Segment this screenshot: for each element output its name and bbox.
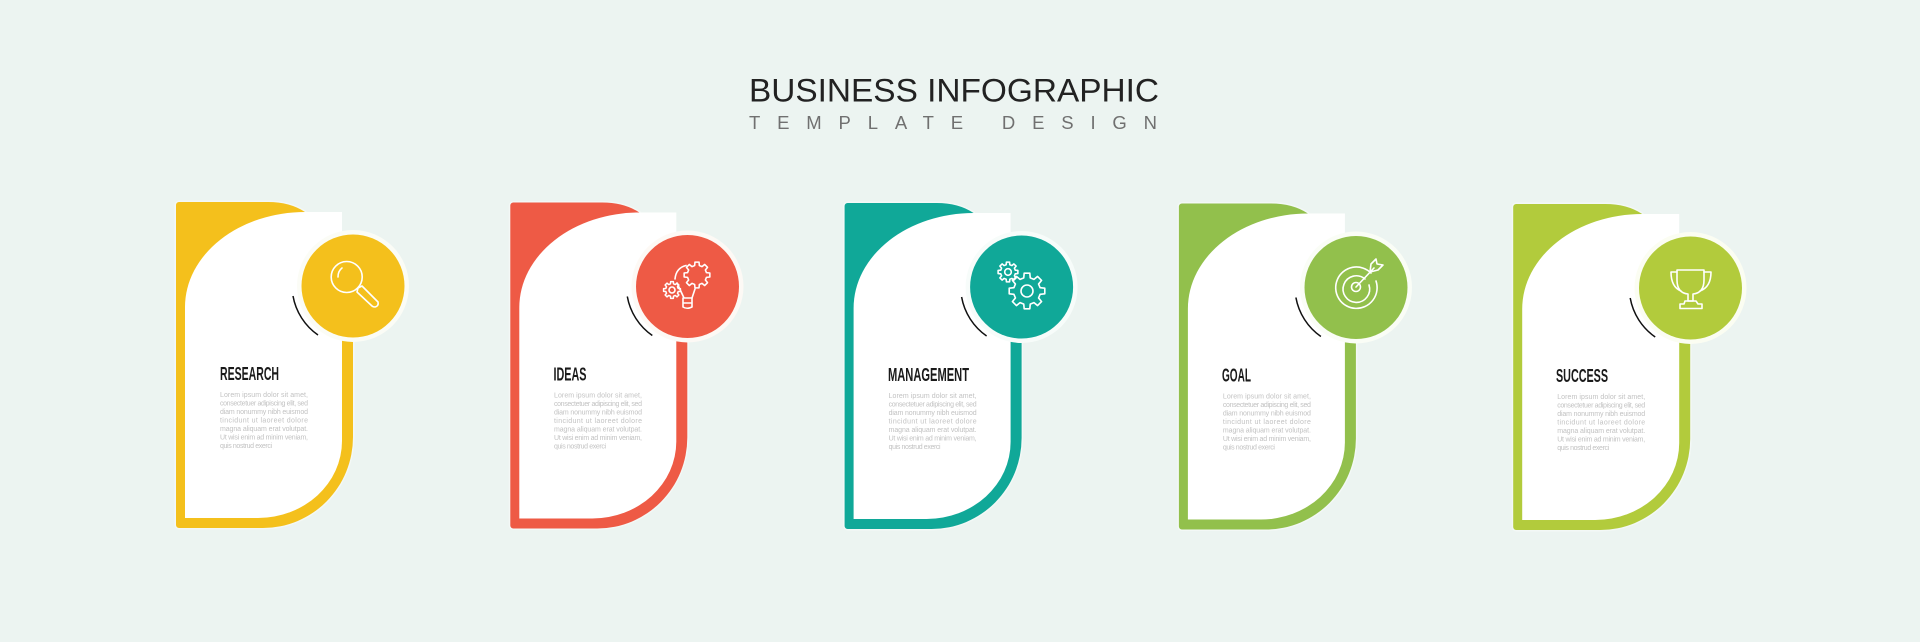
panel: ideas xyxy=(510,202,744,528)
text block: management: quis nostrud exerci xyxy=(889,444,941,451)
text block: management: Lorem ipsum dolor sit amet, xyxy=(889,393,977,400)
text block: goal: quis nostrud exerci xyxy=(1223,444,1275,452)
text block: goal: tincidunt ut laoreet dolore xyxy=(1223,419,1311,426)
text block: ideas: tincidunt ut laoreet dolore xyxy=(554,418,642,425)
icon: trophy xyxy=(1671,270,1711,308)
subtitle: TEMPLATE DESIGN xyxy=(749,112,1157,133)
panel: goal xyxy=(1179,204,1412,530)
text block: success: quis nostrud exerci xyxy=(1557,445,1610,452)
text block: success: tincidunt ut laoreet dolore xyxy=(1557,420,1645,426)
text block: research: quis nostrud exerci xyxy=(220,443,272,450)
icon: magnifying glass xyxy=(331,262,378,307)
title: BUSINESS INFOGRAPHIC xyxy=(749,72,1159,108)
text block: research: tincidunt ut laoreet dolore xyxy=(220,418,308,424)
panel: management xyxy=(845,203,1078,529)
text block: research: Lorem ipsum dolor sit amet, xyxy=(220,392,308,399)
text block: success xyxy=(1557,394,1645,452)
text block: success: consectetuer adipiscing elit, sed xyxy=(1557,402,1645,410)
heading: success: SUCCESS xyxy=(1556,366,1608,386)
text block: ideas: Ut wisi enim ad minim veniam, xyxy=(554,435,642,442)
text block: success: Lorem ipsum dolor sit amet, xyxy=(1557,394,1645,401)
text block: goal xyxy=(1223,394,1311,452)
text block: research xyxy=(220,392,308,450)
text block: research: Ut wisi enim ad minim veniam, xyxy=(220,434,308,442)
text block: management: magna aliquam erat volutpat. xyxy=(889,427,977,434)
text block: goal: Lorem ipsum dolor sit amet, xyxy=(1223,394,1311,400)
text block: success: diam nonummy nibh euismod xyxy=(1557,411,1645,418)
text block: success: magna aliquam erat volutpat. xyxy=(1557,428,1645,435)
text block: goal: consectetuer adipiscing elit, sed xyxy=(1223,402,1311,409)
text block: research: diam nonummy nibh euismod xyxy=(220,409,308,416)
heading: management: MANAGEMENT xyxy=(888,365,969,385)
text block: research: consectetuer adipiscing elit, sed xyxy=(220,400,308,408)
heading: goal: GOAL xyxy=(1222,366,1251,386)
text block: goal: magna aliquam erat volutpat. xyxy=(1223,428,1311,434)
icon: light bulb with gears xyxy=(664,262,710,308)
text block: success: Ut wisi enim ad minim veniam, xyxy=(1557,436,1645,444)
text block: goal: Ut wisi enim ad minim veniam, xyxy=(1223,436,1311,443)
panel: success xyxy=(1513,204,1746,530)
text block: management xyxy=(889,393,977,451)
heading: ideas: IDEAS xyxy=(554,364,586,384)
icon: gears xyxy=(998,262,1045,309)
text block: ideas: diam nonummy nibh euismod xyxy=(554,410,642,416)
text block: research: magna aliquam erat volutpat. xyxy=(220,426,308,433)
icon: target with arrow xyxy=(1336,259,1383,308)
text block: ideas: consectetuer adipiscing elit, sed xyxy=(554,401,642,408)
heading: research: RESEARCH xyxy=(220,364,279,384)
text block: management: consectetuer adipiscing elit, sed xyxy=(889,402,977,408)
text block: goal: diam nonummy nibh euismod xyxy=(1223,410,1311,418)
text block: ideas xyxy=(554,392,642,450)
text block: ideas: Lorem ipsum dolor sit amet, xyxy=(554,392,642,400)
text block: management: diam nonummy nibh euismod xyxy=(889,410,977,417)
text block: management: Ut wisi enim ad minim veniam, xyxy=(889,436,977,442)
text block: ideas: quis nostrud exerci xyxy=(554,444,606,450)
panel: research xyxy=(176,202,409,528)
text block: ideas: magna aliquam erat volutpat. xyxy=(554,426,642,434)
text block: management: tincidunt ut laoreet dolore xyxy=(889,418,977,426)
